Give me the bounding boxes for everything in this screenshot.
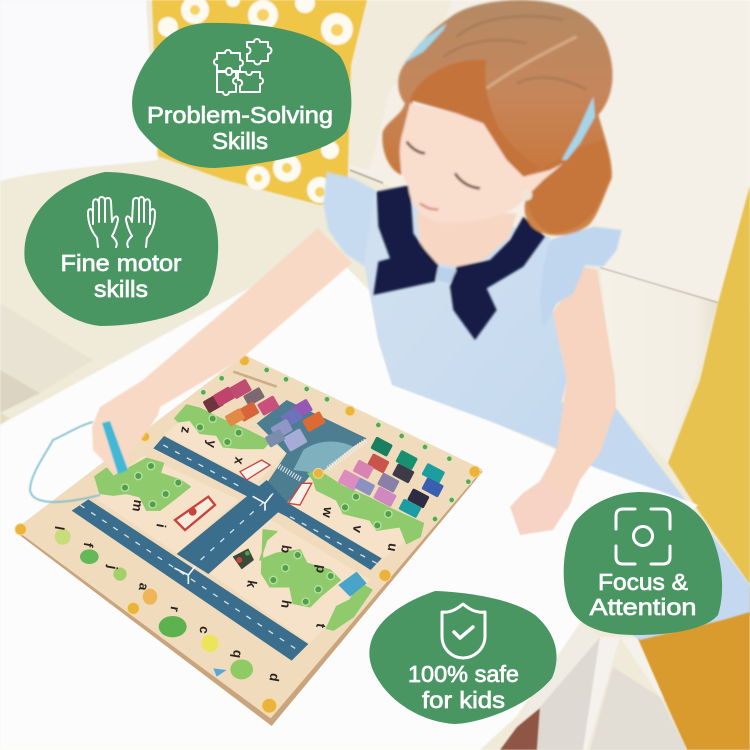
left sleeve (323, 172, 375, 267)
girl: right arm (535, 267, 616, 510)
eyelashes (407, 142, 480, 188)
board: alphabet letters: y (204, 439, 220, 450)
left white pillow (0, 0, 158, 181)
board: yellow corner pegs (15, 356, 480, 713)
left arm and hand with stylus (30, 228, 352, 502)
icon: focus frame (616, 509, 670, 564)
neck (417, 213, 517, 267)
board: alphabet letters: l (52, 525, 67, 531)
board: toy car and bus pieces (175, 460, 312, 530)
face (400, 103, 563, 223)
badge: 100% safe for kids: for kids (422, 687, 505, 713)
board: alphabet letters: t (313, 622, 329, 630)
board: wood base (15, 357, 483, 726)
label: Problem-Solving (147, 102, 333, 128)
hair parting highlight (487, 37, 577, 88)
board: alphabet letters: i (153, 523, 169, 529)
board: teal plaza (257, 400, 367, 503)
board: magnetic maze (15, 355, 483, 726)
front hair: reddish fringe (410, 60, 540, 177)
badge: focus and attention: Attention (590, 594, 696, 620)
board: alphabet letters: x (231, 456, 247, 466)
yellow blanket (637, 185, 750, 750)
board: green maze tracks (95, 405, 423, 630)
sofa base and table leg lower right (500, 623, 687, 750)
girl: head, collar and sleeves (323, 0, 622, 340)
board: alphabet letters: m (129, 499, 146, 513)
badge: problem-solving skills (132, 23, 351, 168)
yellow flowered pillow (152, 0, 367, 205)
board: road markings (80, 445, 377, 652)
board: alphabet letters: f (81, 541, 96, 549)
board: top slot (233, 372, 277, 387)
badge: fine motor skills: skills (94, 276, 148, 302)
board: alphabet letters: j (105, 563, 121, 571)
board: alphabet letters: d (266, 672, 283, 683)
badge: fine motor skills (24, 172, 218, 326)
label: 100% safe (408, 661, 519, 687)
board: alphabet letters: k (244, 579, 260, 590)
icon: open hands (88, 197, 155, 247)
navy collar (373, 185, 438, 295)
skirt behind table (530, 400, 750, 640)
board: rim beads (200, 367, 471, 522)
label: Focus & (598, 569, 688, 595)
board: tan road blocks (93, 405, 423, 643)
right sleeve (540, 227, 622, 328)
board: crosswalks (277, 440, 367, 480)
right fist (510, 478, 572, 535)
blob (24, 172, 218, 326)
board: alphabet letters: b (278, 544, 294, 554)
board: alphabet letters: p (313, 564, 329, 574)
board: trees (55, 529, 253, 679)
blob (564, 492, 722, 635)
board: alphabet letters: c (196, 625, 212, 636)
board: lower right letter tiles (338, 436, 445, 518)
icon: shield with check (442, 604, 485, 658)
board: alphabet letters: q (230, 649, 246, 659)
stylus string (30, 422, 100, 502)
board: alphabet letters: v (350, 524, 366, 535)
board: magnetic beads (121, 415, 392, 605)
badge: focus and attention (564, 492, 722, 635)
hair clips (403, 23, 447, 63)
board: traffic light piece (233, 548, 254, 569)
board: alphabet letters: z (178, 426, 194, 435)
board: alphabet letters: h (278, 599, 294, 609)
white table top (0, 250, 698, 750)
mouth (420, 203, 438, 209)
label: Fine motor (60, 250, 182, 276)
collar knot (436, 267, 457, 283)
badge: 100% safe for kids (369, 591, 557, 724)
back curls: auburn (528, 140, 609, 233)
board: upper letter tiles (202, 379, 326, 452)
girl: dress body (365, 190, 567, 445)
board: alphabet letters: u (385, 542, 401, 553)
board: alphabet letters: r (167, 605, 183, 613)
icon: puzzle pieces (214, 39, 272, 95)
board: alphabet letters: a (136, 582, 152, 592)
blob (369, 591, 557, 724)
blob (132, 23, 351, 168)
blue stylus (102, 421, 128, 474)
left arm (92, 228, 352, 473)
board: alphabet letters (52, 426, 401, 683)
badge: problem-solving skills: Skills (212, 128, 268, 154)
board: blue tile (338, 572, 367, 597)
girl figure (365, 190, 616, 510)
earring (521, 189, 532, 201)
board: alphabet letters: w (319, 505, 336, 519)
board: blue roads (72, 436, 382, 661)
hair strands (443, 16, 587, 90)
hair (382, 0, 613, 235)
